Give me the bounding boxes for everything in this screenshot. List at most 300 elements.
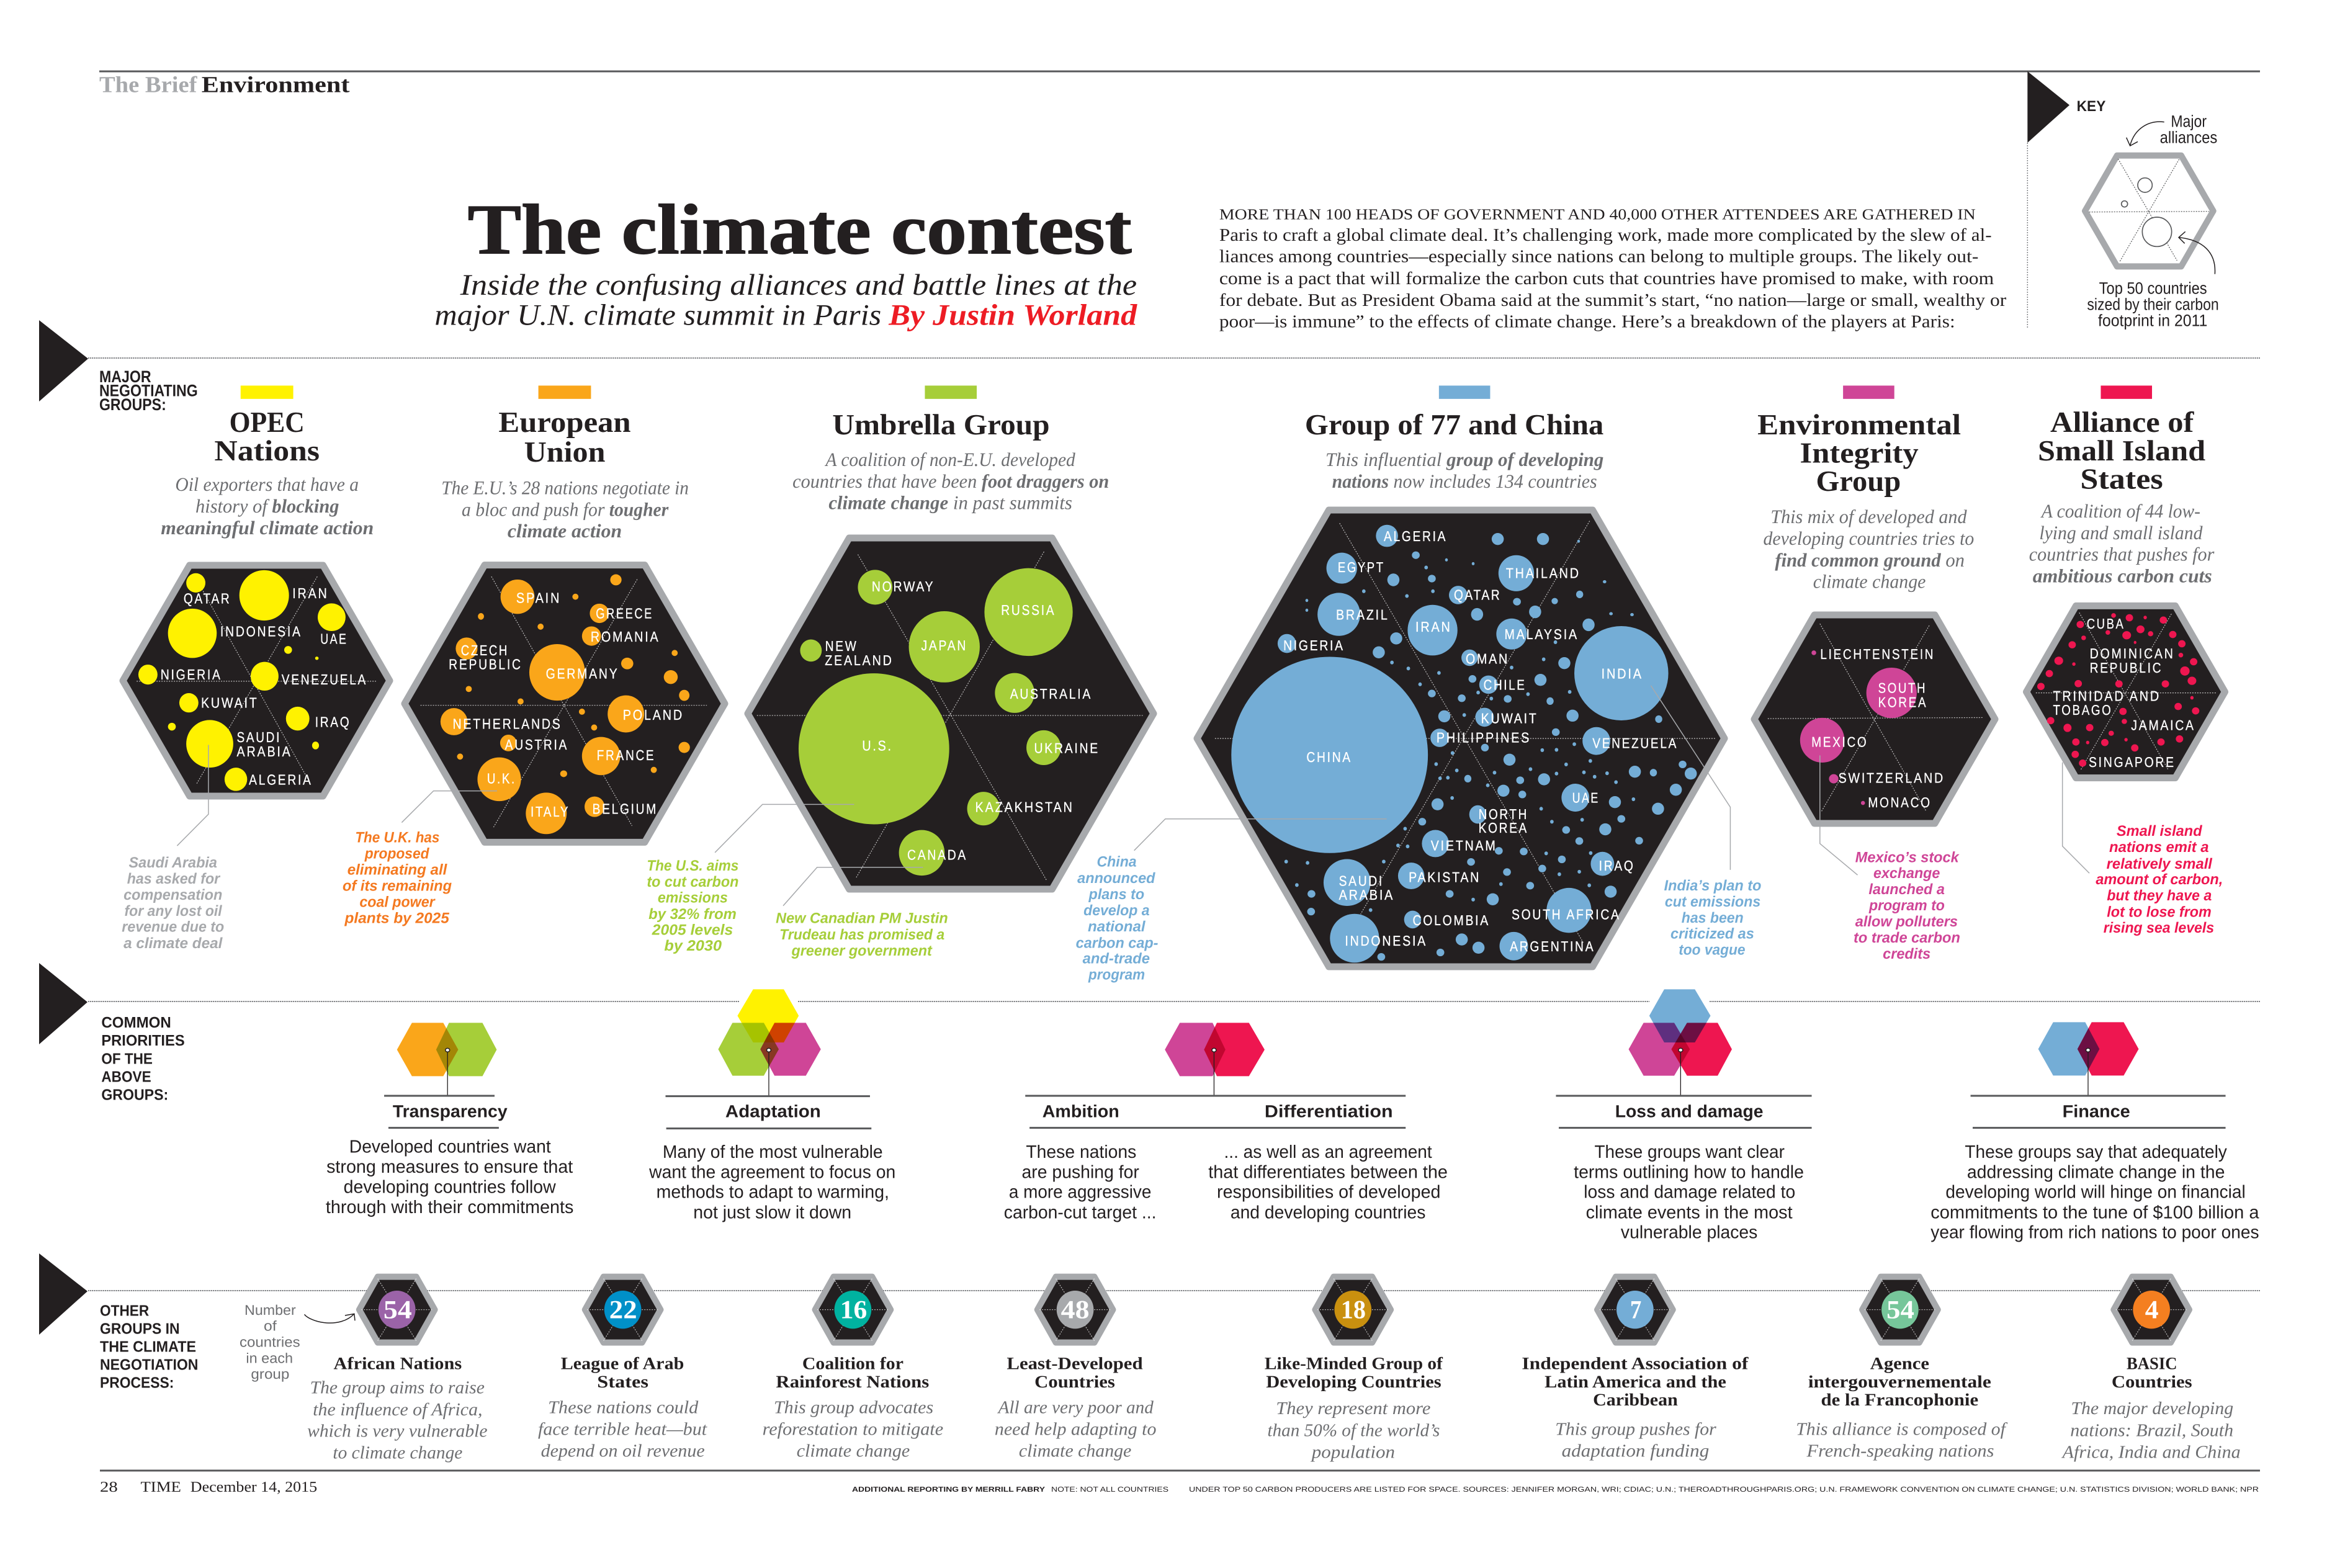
text: climate change bbox=[1019, 1440, 1131, 1461]
callout: India: too vague bbox=[1679, 941, 1746, 958]
other group: League of Arab States bbox=[538, 1277, 707, 1461]
text: This mix of developed and bbox=[1770, 506, 1967, 527]
panel: Group of 77 and China hexagon: SOUTH AFRICA bbox=[1512, 907, 1621, 923]
callout: China: China bbox=[1096, 853, 1137, 870]
callout: Mexico: program to bbox=[1868, 897, 1945, 913]
text: Independent Association of bbox=[1522, 1354, 1749, 1373]
group header: Umbrella Group: countries that have been foot draggers on bbox=[792, 470, 1109, 492]
badge: 18 bbox=[1315, 1277, 1391, 1343]
panel: Group of 77 and China hexagon: IRAQ bbox=[1599, 858, 1635, 874]
panel: Group of 77 and China hexagon: SAUDI bbox=[1339, 872, 1384, 889]
callout: China: plans to bbox=[1088, 886, 1144, 903]
text: to climate change bbox=[333, 1443, 462, 1463]
other group: BASIC Countries: BASIC bbox=[2127, 1354, 2177, 1373]
panel: Group of 77 and China hexagon: MALAYSIA bbox=[1505, 626, 1579, 642]
panel: OPEC hexagon: IRAN bbox=[292, 585, 329, 601]
callout: Mexico: launched a bbox=[1868, 881, 1945, 898]
group header: European Union: a bloc and push for tougher bbox=[462, 499, 668, 520]
key caption: major alliances: Major bbox=[2171, 112, 2207, 130]
panel: Group of 77 and China hexagon: PHILIPPINES bbox=[1437, 730, 1531, 746]
panel: Group of 77 and China hexagon: NIGERIA bbox=[1283, 637, 1345, 653]
text: population bbox=[1311, 1441, 1395, 1462]
group header: Environmental Integrity Group: Integrity bbox=[1800, 437, 1919, 469]
priority: Loss and damage bbox=[1556, 989, 1812, 1242]
callout: China: and-trade bbox=[1083, 950, 1150, 967]
other group: Independent Association of Latin America and the Caribbean: Caribbean bbox=[1593, 1390, 1678, 1409]
text: and developing countries bbox=[1231, 1202, 1425, 1222]
text: developing countries follow bbox=[344, 1177, 556, 1197]
panel: European Union hexagon: POLAND bbox=[623, 707, 684, 723]
panel: Alliance of Small Island States hexagon bbox=[2027, 606, 2225, 778]
callout: U.K.: plants by 2025 bbox=[344, 910, 449, 926]
text: vulnerable places bbox=[1621, 1222, 1757, 1242]
text: December 14, 2015 bbox=[191, 1479, 317, 1495]
badge: 54 bbox=[1862, 1277, 1938, 1343]
leader line: U.S. bbox=[715, 804, 854, 853]
badge: 7 bbox=[1597, 1277, 1673, 1343]
badge: 48: 48 bbox=[1061, 1295, 1090, 1324]
panel: Group of 77 and China hexagon: THAILAND bbox=[1506, 565, 1580, 581]
panel: Group of 77 and China hexagon: ARGENTINA bbox=[1510, 938, 1595, 954]
panel: Group of 77 and China hexagon: INDIA bbox=[1602, 666, 1643, 682]
callout: China: national bbox=[1088, 918, 1146, 935]
panel: Umbrella Group hexagon: CANADA bbox=[907, 847, 967, 862]
group header: Alliance of Small Island States bbox=[2029, 385, 2215, 587]
footer: credits and sources bbox=[852, 1486, 2259, 1494]
callout: U.S.: by 32% from bbox=[648, 905, 737, 922]
badge: 54: 54 bbox=[1886, 1295, 1914, 1324]
text: GROUPS: bbox=[101, 1086, 168, 1103]
overlapping hexagons: blue and red bbox=[2038, 1022, 2138, 1096]
key arrow to circle bbox=[2179, 231, 2215, 274]
group header: Environmental Integrity Group: climate change bbox=[1813, 571, 1926, 593]
arrow: note to badge bbox=[304, 1314, 355, 1323]
group header: European Union: Union bbox=[524, 436, 605, 468]
callout: small islands: but they have a bbox=[2107, 887, 2212, 904]
overlapping hexagons: pink and red bbox=[1165, 1023, 1265, 1096]
text: Coalition for bbox=[802, 1354, 903, 1373]
panel: OPEC hexagon: ALGERIA bbox=[249, 772, 313, 788]
callout: China: announced bbox=[1077, 870, 1155, 887]
text: responsibilities of developed bbox=[1217, 1182, 1440, 1202]
text: climate change bbox=[797, 1440, 910, 1461]
text: Group of 77 and China bbox=[1305, 409, 1603, 441]
panel: Alliance of Small Island States hexagon: SINGAPORE bbox=[2089, 754, 2176, 770]
panel: OPEC hexagon: SAUDI bbox=[237, 730, 281, 745]
text: The E.U.’s 28 nations negotiate in bbox=[441, 477, 689, 499]
callout: U.K.: coal power bbox=[359, 894, 436, 910]
text: Oil exporters that have a bbox=[175, 473, 359, 495]
callout: U.S.: to cut carbon bbox=[647, 874, 738, 890]
callout: Saudi Arabia: compensation bbox=[123, 887, 222, 903]
panel: Umbrella Group hexagon: RUSSIA bbox=[1001, 602, 1056, 618]
text: This group pushes for bbox=[1555, 1419, 1716, 1439]
text: All are very poor and bbox=[997, 1397, 1154, 1417]
panel: Group of 77 and China hexagon: BRAZIL bbox=[1336, 606, 1389, 622]
callout: Canada: greener government bbox=[791, 943, 933, 959]
section label: other groups: OTHER bbox=[100, 1302, 149, 1319]
text: than 50% of the world’s bbox=[1268, 1420, 1440, 1440]
callout: U.S.: The U.S. aims bbox=[647, 858, 738, 874]
callout: China: carbon cap- bbox=[1076, 934, 1158, 951]
key caption: top 50 countries: Top 50 countries bbox=[2099, 279, 2207, 297]
text: These nations bbox=[1026, 1142, 1136, 1162]
group header: Environmental Integrity Group: Group bbox=[1816, 465, 1901, 498]
panel: Umbrella Group hexagon: U.S. bbox=[862, 738, 893, 754]
panel: Alliance of Small Island States hexagon: TOBAGO bbox=[2053, 702, 2112, 718]
priority: Adaptation bbox=[649, 989, 895, 1222]
text: loss and damage related to bbox=[1584, 1182, 1795, 1202]
panel: Environmental Integrity Group hexagon: SOUTH bbox=[1878, 680, 1927, 696]
text: the influence of Africa, bbox=[313, 1399, 482, 1419]
panel: OPEC hexagon: INDONESIA bbox=[220, 624, 302, 640]
text: Developing Countries bbox=[1266, 1372, 1441, 1391]
callout: small islands: amount of carbon, bbox=[2096, 871, 2223, 887]
panel: European Union hexagon: AUSTRIA bbox=[505, 737, 568, 753]
panel: Group of 77 and China hexagon: EGYPT bbox=[1338, 559, 1385, 575]
panel: European Union hexagon: ITALY bbox=[531, 804, 570, 820]
section label: common priorities bbox=[101, 1014, 185, 1103]
text: strong measures to ensure that bbox=[326, 1157, 573, 1176]
panel: OPEC hexagon: NIGERIA bbox=[161, 667, 222, 683]
priority: Transparency bbox=[326, 1023, 573, 1217]
callout: U.S.: by 2030 bbox=[664, 937, 722, 954]
key caption: major alliances: alliances bbox=[2160, 128, 2217, 146]
panel: OPEC hexagon bbox=[123, 565, 390, 796]
text: reforestation to mitigate bbox=[763, 1419, 943, 1439]
callout: small islands: relatively small bbox=[2107, 855, 2213, 872]
text: This group advocates bbox=[774, 1397, 933, 1417]
priority: Finance: Finance bbox=[2063, 1101, 2130, 1121]
text: countries bbox=[240, 1334, 300, 1350]
callout: Canada: New Canadian PM Justin bbox=[776, 910, 948, 926]
footer: credits and sources: NOTE: NOT ALL COUNTRIES bbox=[1051, 1486, 1168, 1494]
text: NEGOTIATION bbox=[100, 1356, 198, 1373]
callout: China: develop a bbox=[1083, 902, 1150, 918]
panel: Environmental Integrity Group hexagon: MONACO bbox=[1868, 794, 1932, 810]
callout: India: has been bbox=[1682, 909, 1744, 926]
panel: European Union hexagon: NETHERLANDS bbox=[452, 716, 562, 732]
text: GROUPS IN bbox=[100, 1320, 180, 1337]
overlapping hexagons: blue, pink and red bbox=[1629, 989, 1732, 1096]
key triangle marker bbox=[2027, 71, 2069, 143]
text: The group aims to raise bbox=[310, 1378, 485, 1397]
text: meaningful climate action bbox=[161, 517, 374, 539]
badge: 16: 16 bbox=[840, 1295, 867, 1324]
masthead: The Brief Environment: Environment bbox=[202, 72, 349, 97]
text: Differentiation bbox=[1265, 1101, 1393, 1121]
text: climate events in the most bbox=[1586, 1202, 1793, 1222]
group header: Umbrella Group: Umbrella Group bbox=[832, 409, 1050, 441]
leader line: India bbox=[1651, 686, 1730, 870]
section marker: major negotiating groups bbox=[39, 320, 88, 401]
section label: major negotiating groups: MAJOR bbox=[99, 367, 151, 386]
callout: U.K.: The U.K. has bbox=[355, 829, 439, 846]
text: Latin America and the bbox=[1545, 1372, 1726, 1391]
badge: 7: 7 bbox=[1630, 1295, 1641, 1324]
panel: Group of 77 and China hexagon: KUWAIT bbox=[1481, 710, 1538, 727]
callout: small islands: nations emit a bbox=[2109, 838, 2208, 855]
text: methods to adapt to warming, bbox=[657, 1182, 889, 1202]
callout: Saudi Arabia: a climate deal bbox=[123, 934, 223, 951]
panel: European Union hexagon: SPAIN bbox=[516, 590, 561, 606]
text: carbon-cut target ... bbox=[1004, 1202, 1156, 1222]
panel: Umbrella Group hexagon: NORWAY bbox=[872, 578, 935, 594]
callout: Canada bbox=[776, 910, 948, 959]
callout: Saudi Arabia: revenue due to bbox=[122, 918, 224, 935]
text: that differentiates between the bbox=[1208, 1162, 1448, 1182]
callout: India: cut emissions bbox=[1665, 893, 1760, 910]
text: League of Arab bbox=[561, 1354, 684, 1373]
leader line: U.K. bbox=[401, 791, 497, 823]
text: Inside the confusing alliances and battle lines at the bbox=[460, 269, 1137, 302]
priority: Ambition bbox=[1004, 1096, 1156, 1222]
text: Many of the most vulnerable bbox=[663, 1142, 883, 1162]
text: developing countries tries to bbox=[1764, 527, 1974, 549]
panel: Group of 77 and China hexagon: KOREA bbox=[1479, 820, 1528, 836]
text: adaptation funding bbox=[1562, 1440, 1709, 1461]
panel: Group of 77 and China hexagon: COLOMBIA bbox=[1412, 912, 1490, 928]
note: number of countries in each group bbox=[240, 1302, 300, 1382]
panel: Group of 77 and China hexagon: CHILE bbox=[1484, 677, 1527, 693]
text: The climate contest bbox=[468, 190, 1132, 269]
panel: Alliance of Small Island States hexagon: JAMAICA bbox=[2131, 717, 2195, 733]
callout: Saudi Arabia: Saudi Arabia bbox=[129, 854, 217, 871]
panel: OPEC hexagon: IRAQ bbox=[315, 714, 351, 730]
group header: Group of 77 and China: This influential group of developing bbox=[1325, 449, 1603, 470]
text: which is very vulnerable bbox=[307, 1421, 488, 1441]
group header: Umbrella Group bbox=[792, 385, 1109, 514]
text: a more aggressive bbox=[1009, 1182, 1151, 1202]
callout: Saudi Arabia: for any lost oil bbox=[125, 903, 222, 919]
callout: Mexico: Mexico’s stock bbox=[1855, 849, 1960, 866]
priority: Differentiation bbox=[1154, 1023, 1448, 1222]
panel: Group of 77 and China hexagon: CHINA bbox=[1306, 749, 1352, 765]
text: NEGOTIATING bbox=[99, 381, 198, 400]
leader line: China bbox=[1134, 819, 1387, 851]
callout: U.S.: emissions bbox=[658, 889, 728, 906]
panel: Group of 77 and China hexagon: INDONESIA bbox=[1345, 933, 1427, 949]
badge: 4: 4 bbox=[2145, 1295, 2159, 1324]
badge: 22: 22 bbox=[609, 1295, 637, 1324]
other group: Agence intergouvernementale de la Francophonie: Agence bbox=[1870, 1354, 1929, 1373]
callout: Mexico: exchange bbox=[1873, 865, 1940, 882]
section marker: other groups bbox=[39, 1253, 87, 1335]
panel: Alliance of Small Island States hexagon: DOMINICAN bbox=[2090, 645, 2175, 661]
other group: BASIC Countries bbox=[2061, 1277, 2241, 1462]
text: Least-Developed bbox=[1007, 1354, 1143, 1373]
callout: Mexico: credits bbox=[1883, 945, 1930, 962]
group header: Umbrella Group: climate change in past summits bbox=[828, 492, 1072, 514]
other group: Coalition for Rainforest Nations bbox=[763, 1277, 943, 1461]
badge: 54 bbox=[359, 1277, 435, 1343]
text: THE CLIMATE bbox=[100, 1338, 196, 1355]
text: African Nations bbox=[334, 1354, 462, 1373]
panel: Group of 77 and China hexagon: VIETNAM bbox=[1431, 838, 1497, 854]
text: face terrible heat—but bbox=[538, 1419, 707, 1439]
callout: India bbox=[1664, 877, 1761, 958]
other group: Like-Minded Group of Developing Countries bbox=[1265, 1277, 1443, 1462]
panel: European Union hexagon: GERMANY bbox=[546, 666, 619, 682]
panel: European Union hexagon bbox=[405, 565, 725, 842]
section label: other groups bbox=[100, 1302, 198, 1391]
badge: 16 bbox=[815, 1277, 890, 1343]
panel: Alliance of Small Island States hexagon: CUBA bbox=[2087, 616, 2125, 632]
panel: OPEC hexagon: QATAR bbox=[184, 591, 231, 607]
text: ABOVE bbox=[101, 1068, 151, 1085]
panel: Group of 77 and China hexagon: QATAR bbox=[1454, 587, 1501, 603]
priority: Finance bbox=[1930, 1022, 2259, 1242]
callout: U.K.: proposed bbox=[364, 845, 429, 862]
overlapping hexagons: orange and green bbox=[397, 1023, 496, 1096]
text: need help adapting to bbox=[995, 1419, 1156, 1439]
key caption: top 50 countries: sized by their carbon bbox=[2087, 295, 2219, 313]
masthead: The Brief Environment: The Brief bbox=[99, 72, 197, 97]
panel: European Union hexagon: U.K. bbox=[487, 771, 516, 787]
callout: Mexico: allow polluters bbox=[1855, 913, 1958, 930]
panel: Group of 77 and China hexagon: IRAN bbox=[1415, 619, 1452, 635]
callout: China bbox=[1076, 853, 1158, 983]
callout: U.K.: eliminating all bbox=[347, 861, 447, 878]
group header: Alliance of Small Island States: States bbox=[2080, 463, 2163, 495]
group header: OPEC Nations: OPEC bbox=[230, 406, 305, 439]
panel: Environmental Integrity Group hexagon: SWITZERLAND bbox=[1839, 770, 1945, 786]
callout: small islands: Small island bbox=[2117, 823, 2202, 840]
overlapping hexagons: yellow, green and pink bbox=[718, 989, 821, 1096]
panel: Umbrella Group hexagon: JAPAN bbox=[921, 637, 967, 653]
panel: Umbrella Group hexagon bbox=[748, 538, 1154, 889]
group header: European Union: climate action bbox=[508, 520, 622, 542]
text: OF THE bbox=[101, 1050, 153, 1067]
panel: OPEC hexagon: KUWAIT bbox=[201, 695, 259, 711]
badge: 4 bbox=[2114, 1277, 2189, 1343]
text: By Justin Worland bbox=[889, 298, 1137, 331]
text: Transparency bbox=[393, 1101, 508, 1121]
text: want the agreement to focus on bbox=[649, 1162, 895, 1182]
group header: European Union bbox=[441, 385, 689, 542]
callout: U.K. bbox=[343, 829, 452, 926]
text: Number bbox=[244, 1302, 296, 1318]
callout: China: program bbox=[1088, 967, 1145, 983]
group header: European Union: European bbox=[498, 406, 631, 439]
panel: Umbrella Group hexagon: UKRAINE bbox=[1034, 740, 1100, 756]
key arrow to hexagon bbox=[2127, 122, 2164, 146]
callout: small islands bbox=[2096, 823, 2223, 936]
callout: U.S. bbox=[647, 858, 738, 954]
callout: Mexico: to trade carbon bbox=[1854, 930, 1960, 946]
text: group bbox=[251, 1366, 289, 1382]
section marker: common priorities bbox=[39, 963, 87, 1044]
subtitle and byline bbox=[434, 269, 1137, 331]
section label: major negotiating groups bbox=[99, 367, 198, 414]
badge: 48 bbox=[1038, 1277, 1113, 1343]
text: not just slow it down bbox=[693, 1202, 851, 1222]
text: Developed countries want bbox=[349, 1137, 551, 1157]
text: ... as well as an agreement bbox=[1224, 1142, 1432, 1162]
panel: European Union hexagon: ROMANIA bbox=[591, 629, 660, 645]
text: Ambition bbox=[1042, 1101, 1119, 1121]
callout: U.K.: of its remaining bbox=[343, 877, 452, 894]
text: These nations could bbox=[548, 1397, 698, 1417]
badge: 22 bbox=[585, 1277, 660, 1343]
text: A coalition of non-E.U. developed bbox=[824, 449, 1075, 470]
key caption: major alliances bbox=[2160, 112, 2217, 146]
footer: credits and sources: UNDER TOP 50 CARBON PRODUCERS ARE LISTED FOR SPACE. SOURCES: JENNIFER MORGAN, WRI; CDIAC; U.N.; THEROADTHROUGHPARIS.ORG; U.N. FRAMEWORK CONVENTION ON CLIMATE CHANGE; U.N. STATISTICS DIVISION; WORLD BANK; NPR bbox=[1189, 1486, 2259, 1494]
group header: Environmental Integrity Group bbox=[1757, 385, 1974, 593]
panel: Environmental Integrity Group hexagon: LIECHTENSTEIN bbox=[1820, 646, 1935, 662]
group header: Environmental Integrity Group: Environmental bbox=[1757, 409, 1961, 441]
panel: Environmental Integrity Group hexagon bbox=[1754, 615, 1995, 823]
panel: Group of 77 and China hexagon: PAKISTAN bbox=[1409, 869, 1481, 885]
note: number of countries in each group: of bbox=[264, 1318, 277, 1333]
panel: Group of 77 and China hexagon: NORTH bbox=[1479, 806, 1528, 822]
other group: Independent Association of Latin America and the Caribbean bbox=[1522, 1277, 1749, 1461]
panel: Group of 77 and China hexagon bbox=[1197, 510, 1724, 967]
panel: European Union hexagon: REPUBLIC bbox=[449, 656, 522, 673]
panel: Group of 77 and China hexagon: UAE bbox=[1572, 790, 1600, 806]
callout: small islands: lot to lose from bbox=[2107, 903, 2212, 920]
group header: Group of 77 and China bbox=[1305, 385, 1603, 492]
text: in each bbox=[246, 1350, 293, 1366]
badge: 54: 54 bbox=[383, 1295, 412, 1324]
panel: Group of 77 and China hexagon: VENEZUELA bbox=[1592, 735, 1678, 751]
footer: folio and date bbox=[100, 1479, 317, 1495]
callout: Canada: Trudeau has promised a bbox=[779, 926, 944, 943]
callout: India: India’s plan to bbox=[1664, 877, 1761, 894]
other group: African Nations bbox=[307, 1277, 488, 1463]
panel: European Union hexagon: BELGIUM bbox=[593, 801, 658, 817]
text: They represent more bbox=[1276, 1398, 1430, 1418]
group header: OPEC Nations bbox=[161, 385, 374, 539]
group header: Environmental Integrity Group: find common ground on bbox=[1775, 549, 1965, 571]
text: Rainforest Nations bbox=[776, 1372, 929, 1391]
text: PRIORITIES bbox=[101, 1032, 185, 1049]
panel: Alliance of Small Island States hexagon: REPUBLIC bbox=[2090, 660, 2163, 676]
footer: folio and date: 28 bbox=[100, 1479, 118, 1495]
key heading: KEY bbox=[2077, 98, 2105, 114]
badge: 18: 18 bbox=[1341, 1295, 1366, 1324]
text: These groups want clear bbox=[1594, 1142, 1785, 1162]
group header: OPEC Nations: history of blocking bbox=[195, 495, 339, 517]
other group: Least-Developed Countries bbox=[995, 1277, 1156, 1461]
text: de la Francophonie bbox=[1821, 1390, 1978, 1409]
callout: U.S.: 2005 levels bbox=[652, 921, 733, 938]
text: depend on oil revenue bbox=[541, 1440, 705, 1461]
panel: European Union hexagon: CZECH bbox=[461, 642, 509, 658]
panel: European Union hexagon: FRANCE bbox=[597, 748, 655, 763]
key caption: top 50 countries: footprint in 2011 bbox=[2098, 311, 2207, 329]
other group: League of Arab States: States bbox=[597, 1372, 648, 1391]
intro paragraph bbox=[1219, 206, 2006, 331]
panel: Group of 77 and China hexagon: OMAN bbox=[1466, 651, 1509, 667]
group header: OPEC Nations: Nations bbox=[214, 435, 320, 467]
panel: Umbrella Group hexagon: KAZAKHSTAN bbox=[975, 799, 1074, 815]
panel: Umbrella Group hexagon: NEW bbox=[825, 638, 858, 654]
footer: folio and date: TIME bbox=[140, 1479, 181, 1495]
panel: Umbrella Group hexagon: AUSTRALIA bbox=[1010, 686, 1092, 702]
panel: OPEC hexagon: VENEZUELA bbox=[282, 672, 367, 688]
group header: Group of 77 and China: nations now includes 134 countries bbox=[1332, 470, 1597, 492]
text: Like-Minded Group of bbox=[1265, 1354, 1443, 1373]
panel: Environmental Integrity Group hexagon: KOREA bbox=[1878, 694, 1927, 710]
panel: Environmental Integrity Group hexagon: MEXICO bbox=[1811, 734, 1868, 750]
panel: European Union hexagon: GREECE bbox=[596, 606, 653, 622]
panel: Umbrella Group hexagon: ZEALAND bbox=[825, 652, 894, 668]
panel: OPEC hexagon: ARABIA bbox=[237, 743, 292, 759]
callout: Mexico bbox=[1854, 849, 1960, 962]
callout: Saudi Arabia bbox=[122, 854, 224, 951]
leader line: small islands bbox=[2063, 763, 2089, 873]
